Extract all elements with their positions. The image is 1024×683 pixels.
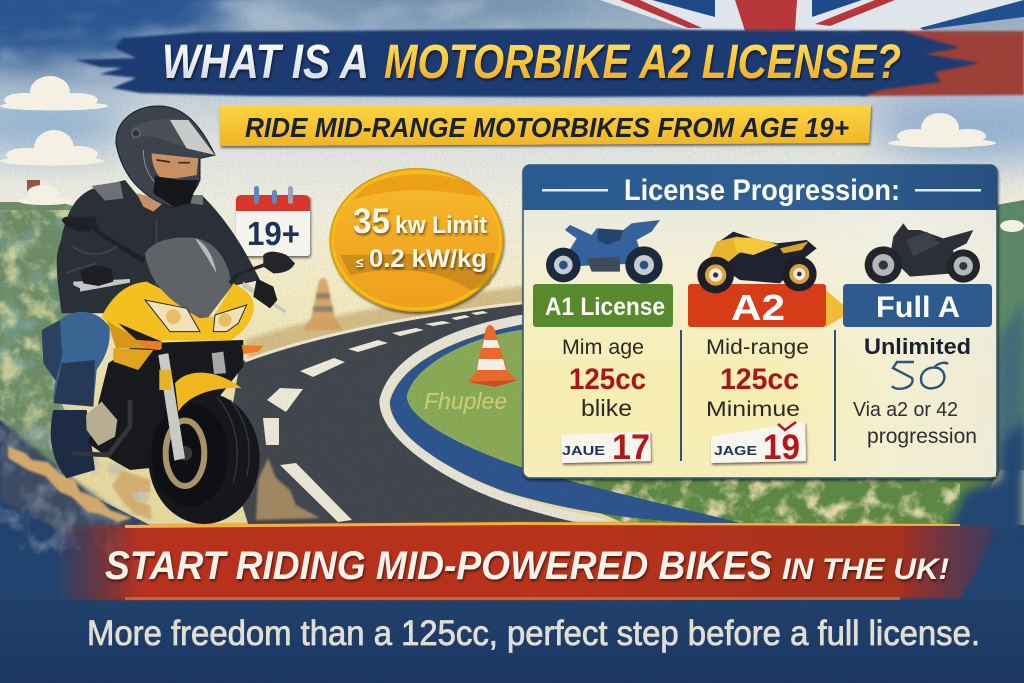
- road dashes: [267, 311, 488, 412]
- call-to-action banner: [55, 522, 996, 600]
- right hills: [996, 200, 1024, 470]
- tagline: More freedom than a 125cc, perfect step before a full license.: [87, 614, 980, 653]
- rider boot: [51, 410, 95, 478]
- A1 details: blike: [581, 395, 632, 421]
- title banner: [75, 29, 1024, 97]
- right mirror and stem: [228, 252, 295, 285]
- limit text: kw Limit: [395, 212, 487, 239]
- A1 details: [561, 336, 651, 467]
- jacket folds: [67, 220, 157, 287]
- limit text: ≤: [356, 255, 363, 270]
- bike icon: A1 blue: [546, 220, 663, 284]
- title text: WHAT IS A: [162, 36, 369, 89]
- grain overlay: [0, 600, 1024, 683]
- handlebars: [73, 279, 287, 313]
- handwritten mark on grass: Fhuplee: [424, 388, 507, 414]
- age tag 17: [561, 428, 651, 467]
- rider jeans: [53, 312, 110, 407]
- gloves: [80, 265, 277, 308]
- license progression panel: [523, 165, 997, 478]
- indicators: [137, 340, 263, 354]
- title text: [162, 36, 901, 89]
- limit text: 35: [353, 202, 390, 241]
- rider jacket: [57, 180, 260, 313]
- left horizon building: [27, 180, 40, 192]
- motorcycle: [72, 237, 263, 524]
- road kerb: [384, 318, 610, 525]
- helmet: [116, 106, 215, 207]
- ground patches under rider: [8, 446, 320, 522]
- left mirror and stem: [62, 217, 145, 263]
- A2 badge: A2: [731, 287, 785, 328]
- grass: [407, 329, 530, 470]
- A1 details: Mim age: [562, 336, 644, 359]
- A1 details: 125cc: [569, 363, 646, 396]
- left hills: [0, 202, 90, 470]
- full A badge: Full A: [876, 291, 960, 324]
- calendar icon: 19+: 19+: [247, 215, 300, 252]
- A2 badge: [688, 284, 826, 328]
- power limit badge: [330, 168, 504, 312]
- A2 details: Minimue: [706, 398, 800, 421]
- A2 details: [706, 336, 809, 467]
- full A details: progression: [867, 425, 977, 448]
- lower right bushes: [500, 470, 1000, 530]
- infinity-like icon: [892, 362, 948, 389]
- full A badge: [843, 284, 992, 327]
- union jack flag: [600, 0, 1024, 32]
- blue kerb band: [390, 323, 745, 524]
- calendar icon: 19+: [236, 186, 310, 256]
- A1 badge: [533, 284, 673, 327]
- rider on yellow motorcycle: [42, 106, 295, 524]
- upper fairing: [102, 282, 254, 341]
- rider neck: [137, 193, 167, 212]
- subtitle banner: RIDE MID-RANGE MOTORBIKES FROM AGE 19+: [245, 112, 849, 143]
- clouds: [0, 68, 1024, 232]
- A2 details: Mid-range: [706, 336, 809, 359]
- road cone: near: [468, 325, 518, 387]
- panel header: [523, 165, 997, 210]
- A1 badge: A1 License: [545, 293, 665, 321]
- arrow: A2 to full A: [826, 290, 851, 327]
- A2 details: 125cc: [720, 363, 799, 396]
- full A details: Unlimited: [864, 334, 971, 359]
- panel header: License Progression:: [624, 174, 900, 207]
- full A details: Via a2 or 42: [853, 399, 958, 421]
- bike icon: A2 yellow: [697, 232, 817, 293]
- title text: MOTORBIKE A2 LICENSE?: [384, 36, 901, 89]
- age tag 19: 19: [763, 428, 800, 467]
- road surface: [225, 303, 620, 530]
- full A details: [853, 334, 977, 448]
- road side markings: [263, 418, 352, 522]
- headlights: [145, 300, 247, 332]
- bike icon: full A black: [865, 223, 980, 284]
- road cone: distant: [303, 278, 343, 330]
- age tag 19: JAGE: [714, 443, 757, 458]
- age tag 19: [711, 422, 806, 467]
- age tag 17: 17: [612, 428, 650, 467]
- rear bag: [42, 320, 67, 387]
- windscreen: [145, 237, 232, 318]
- call-to-action banner: IN THE UK!: [782, 553, 949, 586]
- navy lower ground: [0, 420, 1024, 683]
- rear fairing: [113, 348, 153, 370]
- front fork: [158, 353, 185, 461]
- call-to-action banner: START RIDING MID-POWERED BIKES: [105, 544, 772, 588]
- tan ground strip behind road: [245, 285, 530, 365]
- age tag 17: JAUE: [562, 443, 605, 458]
- limit text: [353, 202, 487, 273]
- road top edge: [245, 302, 530, 361]
- front mudguard: [175, 373, 242, 412]
- bike chassis and engine: [88, 340, 243, 470]
- limit text: 0.2 kW/kg: [369, 245, 487, 273]
- front wheel: [148, 393, 260, 524]
